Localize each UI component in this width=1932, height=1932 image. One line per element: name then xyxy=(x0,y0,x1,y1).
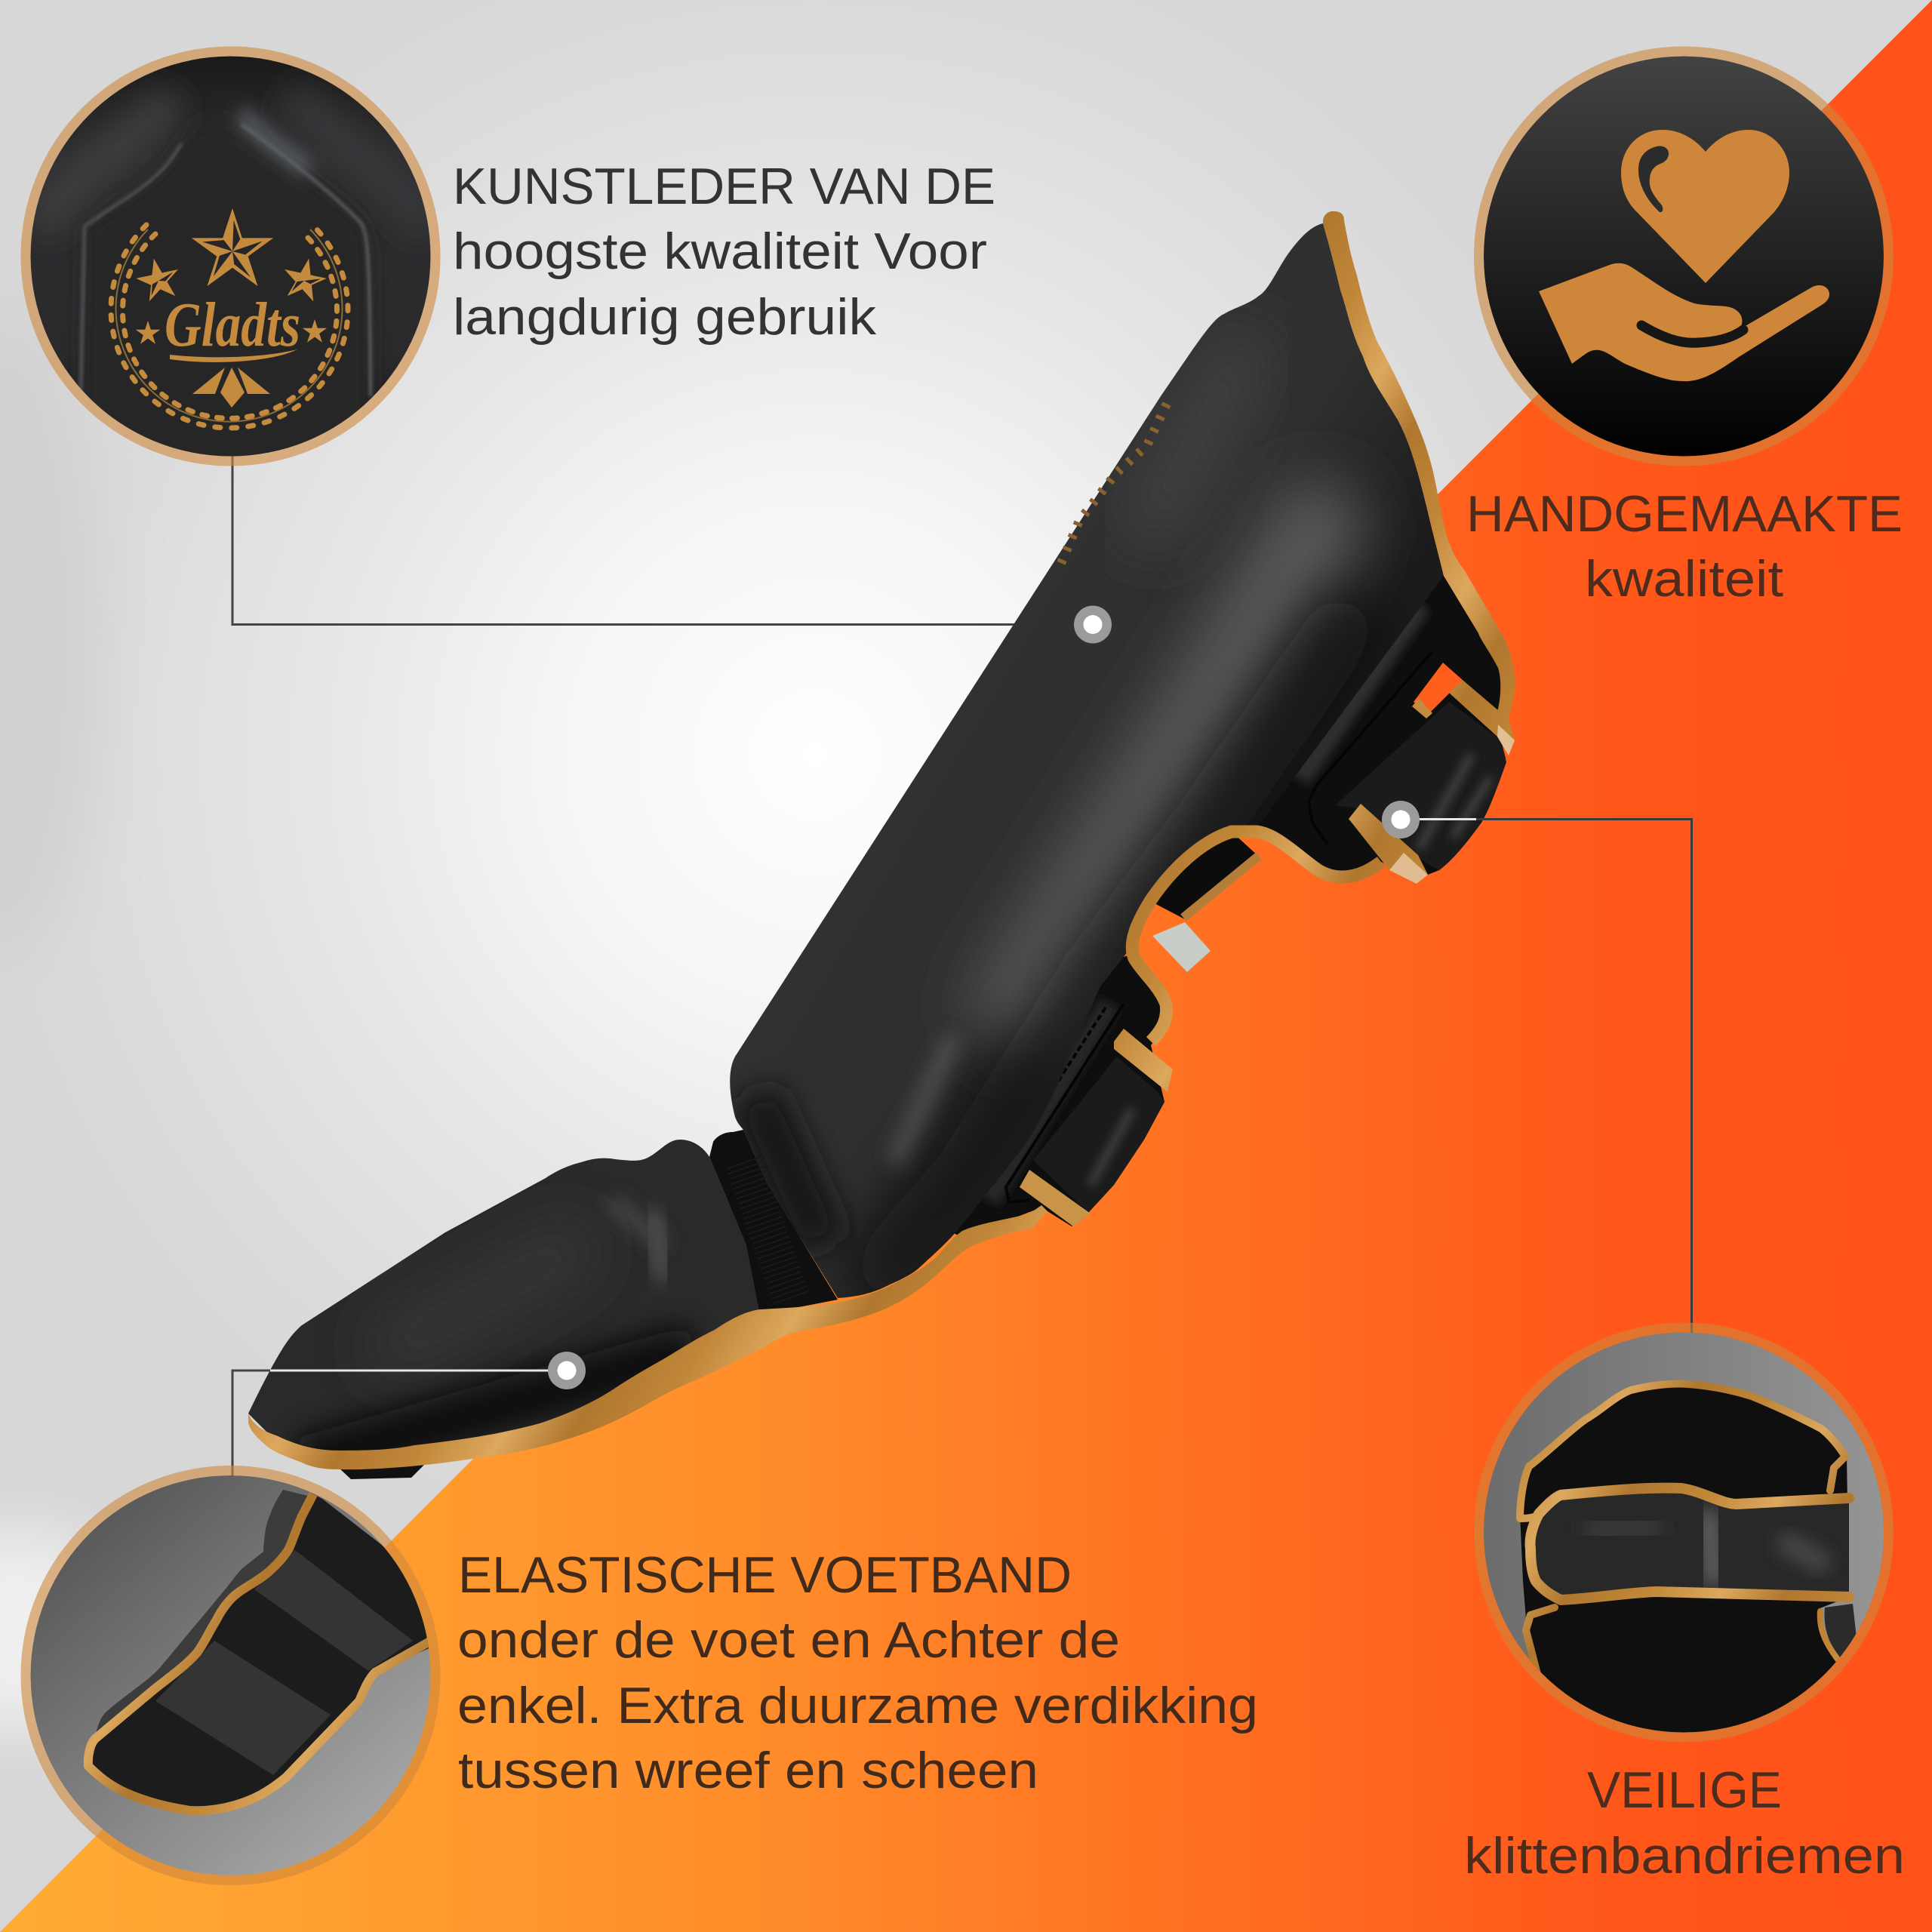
right tiny star xyxy=(303,319,327,343)
sole under toe xyxy=(339,1463,426,1479)
satin strap xyxy=(1529,1485,1849,1600)
outer shell of the foot xyxy=(95,1490,311,1739)
text block: handmade quality: HANDGEMAAKTE xyxy=(1466,485,1903,543)
callout dot: faux leather xyxy=(1074,605,1112,643)
large star xyxy=(192,208,273,286)
lower velcro strap block xyxy=(1033,1057,1164,1213)
panel: circle velcro strap detail xyxy=(1479,1327,1888,1751)
laurel wreath xyxy=(111,225,348,428)
right small star xyxy=(279,254,330,303)
black body of pad xyxy=(1520,1383,1849,1751)
text block: handmade quality xyxy=(1466,485,1903,608)
text block: elastic foot band: onder de voet en Achter de xyxy=(457,1611,1120,1669)
elastic band upper xyxy=(254,1550,413,1671)
glossy panel strip upper xyxy=(1298,604,1419,777)
text block: elastic foot band: tussen wreef en scheen xyxy=(458,1742,1038,1799)
left small star xyxy=(133,254,183,303)
icon: open hand xyxy=(1539,263,1829,381)
text block: faux leather: KUNSTLEDER VAN DE xyxy=(453,158,995,215)
logo wordmark: Gladts xyxy=(165,290,300,360)
text block: faux leather: hoogste kwaliteit Voor xyxy=(453,223,987,280)
upper strap gold loops xyxy=(1349,680,1515,884)
text block: safe velcro straps: klittenbandriemen xyxy=(1464,1827,1905,1884)
callout dot: closures xyxy=(1382,801,1420,838)
side tab right xyxy=(1824,1604,1857,1664)
shin guard back panel upper xyxy=(1208,576,1506,879)
text block: safe velcro straps: VEILIGE xyxy=(1587,1761,1782,1819)
panel gap between gold edge and inner strip xyxy=(1150,832,1259,919)
text block: elastic foot band: ELASTISCHE VOETBAND xyxy=(458,1546,1072,1604)
text block: elastic foot band: enkel. Extra duurzame verdikking xyxy=(457,1677,1258,1734)
stitched seams xyxy=(996,652,1432,1202)
sole interior xyxy=(86,1494,453,1810)
shin guard back panel lower xyxy=(906,955,1167,1238)
circle ring xyxy=(1479,1327,1888,1737)
moulded peak of the pad xyxy=(38,98,430,468)
text block: elastic foot band xyxy=(457,1546,1258,1799)
gold trim along bottom of foot and shin xyxy=(248,1205,1048,1469)
inner gold strip xyxy=(1183,856,1259,918)
logo diamonds xyxy=(192,368,225,394)
lower strap gold loops xyxy=(1020,1029,1173,1226)
text block: faux leather xyxy=(453,158,995,346)
main shin pad xyxy=(730,223,1444,1298)
panel: circle handmade icon xyxy=(1479,51,1888,461)
panel: circle foot band detail xyxy=(26,1470,453,1881)
faint logo leaves on shin pad xyxy=(1060,404,1167,567)
text block: safe velcro straps xyxy=(1464,1761,1905,1884)
gold trim along right edge xyxy=(1323,211,1515,728)
upper velcro strap block xyxy=(1335,702,1506,870)
gold piping of pad and strap xyxy=(1520,1383,1849,1683)
icon: heart xyxy=(1621,130,1789,283)
product: shin guard xyxy=(248,211,1515,1479)
circle ring xyxy=(26,1470,435,1881)
panel: circle logo detail xyxy=(26,51,435,468)
mesh ankle band xyxy=(709,1130,838,1315)
Gladts logo xyxy=(133,208,330,408)
left tiny star xyxy=(136,321,160,344)
gold trim along ankle cut-out xyxy=(1132,832,1381,1041)
orange window in the strap loop xyxy=(1414,663,1463,713)
text block: handmade quality: kwaliteit xyxy=(1585,550,1783,608)
circle ring xyxy=(26,51,435,461)
torn plastic tag xyxy=(1152,922,1211,972)
leader line: foot band xyxy=(232,1371,561,1479)
leader line: faux leather xyxy=(232,453,1087,625)
gold piping xyxy=(88,1494,434,1810)
logo swoosh xyxy=(170,349,297,362)
callout dot: foot band xyxy=(548,1352,586,1389)
circle ring xyxy=(1479,51,1888,461)
leader line: closures xyxy=(1407,820,1692,1336)
text block: faux leather: langdurig gebruik xyxy=(453,288,877,346)
glossy panel strip lower xyxy=(989,1004,1109,1200)
elastic band lower xyxy=(155,1641,331,1775)
foot pad xyxy=(248,1140,762,1464)
